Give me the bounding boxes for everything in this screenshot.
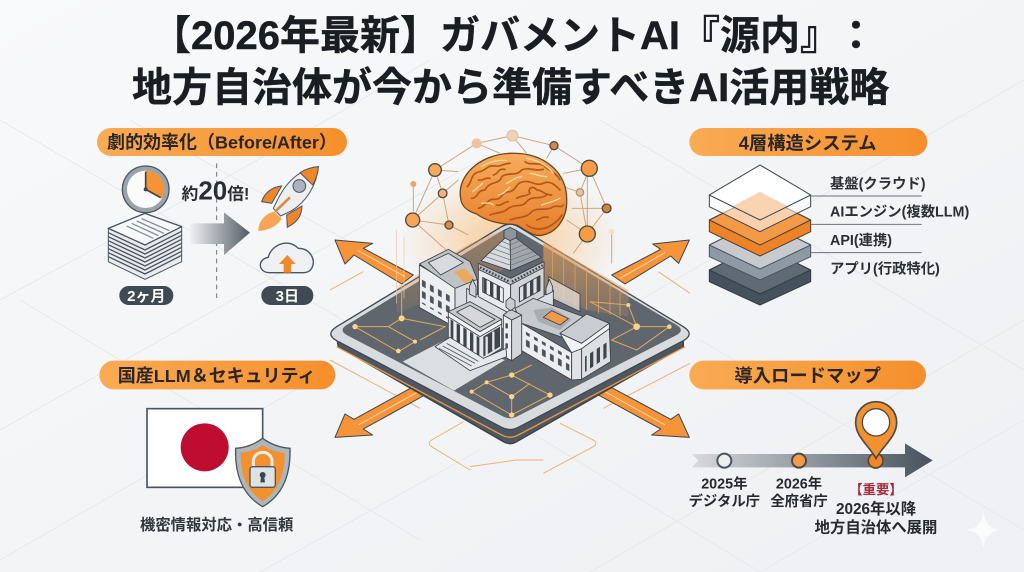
arrow: south west bbox=[335, 387, 425, 437]
glow behind brain and building bbox=[400, 170, 620, 310]
icon: cloud upload bbox=[260, 243, 313, 273]
label: 2 months: 2ヶ月 bbox=[127, 288, 165, 305]
circuit traces on platform bbox=[352, 287, 672, 418]
heading pill: 国産LLM＆セキュリティ bbox=[118, 366, 316, 386]
title: 【2026年最新】ガバメントAI『源内』 ： bbox=[151, 14, 876, 58]
label: important rollout bbox=[815, 482, 937, 537]
heading pill: 4層構造システム bbox=[739, 132, 877, 153]
icon: location pin bbox=[856, 402, 897, 458]
milestone: 2026 bbox=[792, 454, 806, 468]
panel: domestic LLM and security bbox=[99, 361, 335, 534]
layer stack bbox=[709, 165, 811, 305]
glass wall left bbox=[397, 230, 503, 313]
layer labels: AIエンジン(複数LLM) bbox=[830, 203, 970, 221]
panel: introduction roadmap bbox=[689, 361, 999, 548]
label: 2026: 2026年 bbox=[776, 475, 822, 493]
label: 2025: デジタル庁 bbox=[689, 492, 760, 510]
caption: 機密情報対応・高信頼 bbox=[140, 516, 294, 534]
back right translucent wing bbox=[548, 277, 580, 312]
milestone: local governments bbox=[868, 453, 883, 468]
heading pill bbox=[689, 128, 927, 156]
layer labels: 基盤(クラウド) bbox=[830, 175, 926, 193]
right wing roof bbox=[515, 298, 583, 344]
arrow: north east bbox=[612, 240, 689, 284]
icon: shield with padlock bbox=[236, 438, 290, 507]
label: 3 days bbox=[261, 286, 313, 305]
label: 2026: 全府省庁 bbox=[770, 492, 828, 510]
milestone: 2025 bbox=[717, 454, 731, 468]
label: 2025: 2025年 bbox=[701, 475, 747, 493]
label: 2026 bbox=[770, 475, 828, 510]
building bbox=[419, 227, 611, 380]
label: 2 months bbox=[119, 286, 173, 305]
portico bbox=[435, 302, 507, 371]
heading pill: 導入ロードマップ bbox=[734, 365, 881, 386]
layer labels bbox=[830, 175, 970, 277]
arrow: before to after bbox=[190, 212, 250, 255]
heading pill: 劇的効率化（Before/After） bbox=[107, 132, 337, 152]
arrow: north west bbox=[335, 240, 413, 284]
glass wall right bbox=[543, 242, 628, 317]
pier bbox=[503, 297, 522, 361]
title bbox=[132, 14, 889, 110]
brain bbox=[460, 153, 567, 252]
timeline arrow bbox=[692, 443, 933, 477]
circuit lines under platform bbox=[330, 272, 690, 473]
icon: rocket bbox=[258, 167, 318, 231]
icon: document stack bbox=[108, 213, 182, 279]
panel: four layer system bbox=[689, 128, 970, 305]
central illustration: platform, building, brain and arrows bbox=[330, 130, 690, 473]
label: 3 days: 3日 bbox=[276, 288, 299, 305]
layer labels: API(連携) bbox=[830, 231, 892, 249]
heading pill bbox=[99, 361, 335, 389]
leader lines bbox=[811, 196, 922, 253]
neural network bbox=[406, 130, 614, 263]
label: important rollout: 【重要】 bbox=[849, 482, 903, 497]
left wing bbox=[419, 249, 477, 327]
dashed divider bbox=[215, 163, 218, 300]
platform bbox=[331, 224, 689, 444]
icon: Japanese flag bbox=[147, 409, 263, 487]
heading pill bbox=[97, 128, 347, 156]
label: important rollout: 地方自治体へ展開 bbox=[815, 519, 937, 537]
label: 2025 bbox=[689, 475, 760, 510]
arrow: south east bbox=[598, 387, 689, 437]
multiplier text: 約20倍! bbox=[182, 175, 249, 205]
right wing bbox=[522, 314, 611, 380]
label: important rollout: 2026年以降 bbox=[836, 500, 917, 518]
sparkle bbox=[967, 512, 999, 548]
layer labels: アプリ(行政特化) bbox=[830, 260, 940, 277]
title: 地方自治体が今から準備すべきAI活用戦略 bbox=[132, 66, 889, 110]
heading pill bbox=[689, 361, 926, 389]
central tower bbox=[467, 227, 553, 333]
icon: clock bbox=[122, 166, 169, 213]
panel: efficiency before/after bbox=[97, 128, 347, 305]
